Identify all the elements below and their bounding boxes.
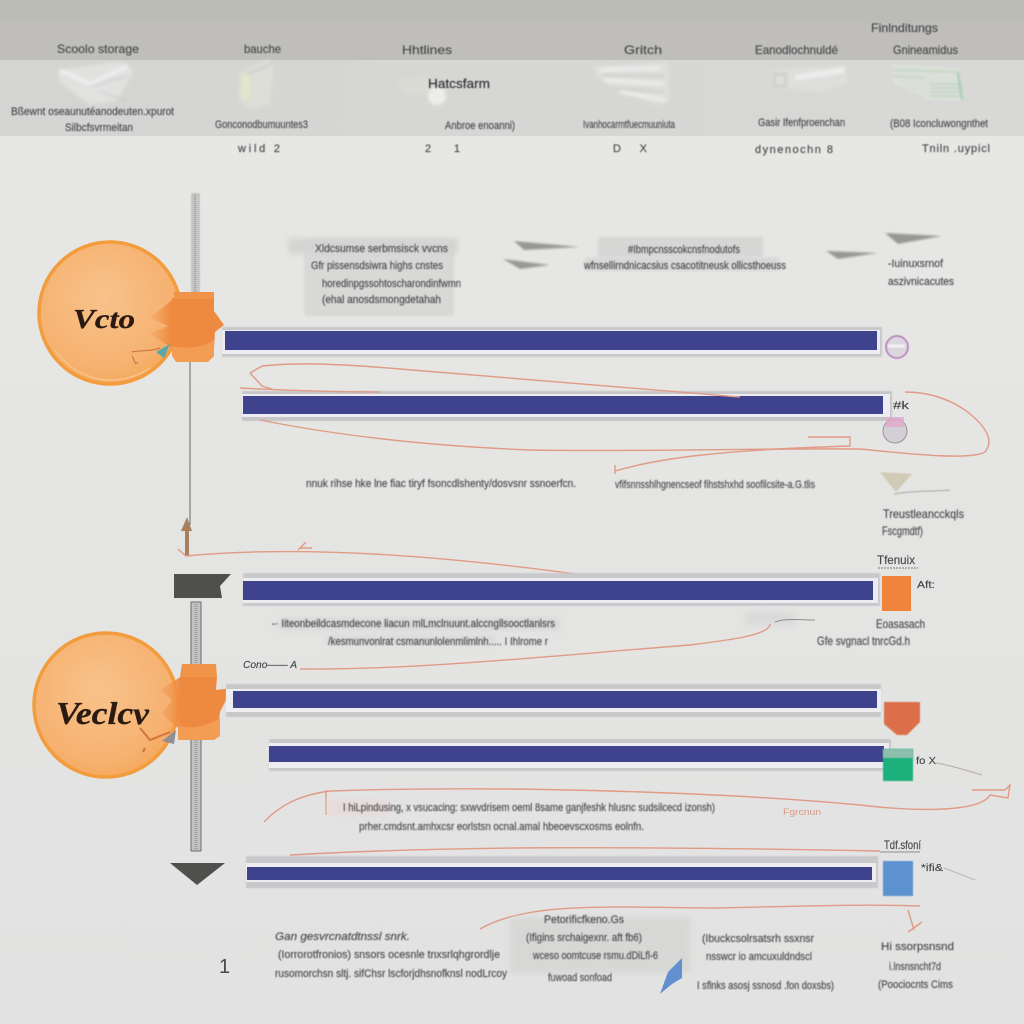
curve: red line to bar 3 bbox=[178, 542, 590, 576]
bottom block centre: fuwoad sonfoad bbox=[548, 972, 612, 984]
label and marker beside bar 2: #k bbox=[893, 400, 910, 412]
connector clip 1 bbox=[132, 292, 224, 364]
side label: Treatment bbox=[882, 507, 964, 538]
label: Velo: Vcto bbox=[73, 304, 135, 334]
header column titles: bauche bbox=[244, 42, 281, 56]
header descriptions: dynenochn 8 bbox=[755, 144, 833, 156]
callout text 1: horedinpgssohtoscharondinfwmn bbox=[322, 278, 461, 290]
bottom block right bbox=[697, 933, 834, 992]
callout text 1 bbox=[288, 238, 461, 316]
label: Velocity: Veclcv bbox=[56, 695, 150, 731]
text under bar 5: I hiLpindusing, x vsucacing: sxwvdrisem oeml 8same ganjfeshk hlusnc sudsilcecd izonsh) bbox=[343, 802, 715, 814]
connector clip 2 bbox=[140, 664, 232, 752]
marker: purple circle bbox=[886, 336, 908, 358]
bottom text block left bbox=[275, 931, 507, 980]
bar 5 bbox=[269, 739, 925, 771]
bottom side label: (Poociocnts Cims bbox=[878, 979, 953, 991]
header icon: storage bbox=[58, 62, 134, 105]
curve: red line above bar 6 bbox=[290, 848, 880, 855]
grey arrows top bbox=[503, 233, 942, 269]
page number: 1 bbox=[219, 956, 230, 978]
top axis scale bbox=[190, 193, 200, 525]
side label top right: -Iuinuxsrnof bbox=[888, 258, 944, 270]
bottom block right: I sflnks asosj ssnosd .fon doxsbs) bbox=[697, 980, 834, 992]
header column titles: Gritch bbox=[624, 43, 662, 57]
curve: red line and arrow bottom bbox=[480, 905, 922, 932]
header column titles: Finlnditungs bbox=[871, 21, 938, 35]
header band bbox=[0, 0, 1024, 136]
bar 2 bbox=[242, 391, 905, 421]
text under bar 5: prher.cmdsnt.amhxcsr eorlstsn ocnal.amal hbeoevscxosms eolnfn. bbox=[359, 821, 644, 833]
bottom block centre: wceso oomtcuse rsmu.dDiLfl-6 bbox=[532, 950, 658, 962]
header descriptions bbox=[11, 106, 990, 156]
curve: red line above bar 4: Cono—— A bbox=[243, 660, 297, 671]
bottom block centre: (Ifigins srchaigexnr. aft fb6) bbox=[526, 932, 642, 944]
callout text 2 bbox=[583, 237, 786, 272]
header icon: case bbox=[770, 65, 848, 92]
callout text 2: #Ibmpcnsscokcnsfnodutofs bbox=[628, 244, 740, 256]
bottom block centre bbox=[510, 914, 690, 984]
circle: Velocity bbox=[34, 633, 178, 777]
bottom block right: (Ibuckcsolrsatsrh ssxnsr bbox=[702, 933, 814, 945]
header descriptions: wild 2 bbox=[237, 143, 280, 155]
bottom text block left: Gan gesvrcnatdtnssl snrk. bbox=[275, 931, 410, 943]
marker: green square bbox=[883, 749, 982, 781]
axis down arrow bbox=[170, 863, 225, 885]
header descriptions: Silbcfsvrmeitan bbox=[65, 122, 133, 134]
callout text 2: wfnsellirndnicacsius csacotitneusk ollicsthoeuss bbox=[583, 260, 786, 272]
side label: Thsiord: Tdf.sfoní bbox=[884, 838, 922, 852]
callout text 1: Gfr pissensdsiwra highs cnstes bbox=[311, 260, 443, 272]
side label: Coasteads bbox=[817, 617, 925, 648]
circle: Velo bbox=[39, 242, 181, 384]
text line under bar 2 bbox=[306, 478, 815, 491]
header icon: panels bbox=[594, 62, 670, 106]
text line under bar 2: nnuk rihse hke lne fiac tiryf fsoncdlshenty/dosvsnr ssnoerfcn. bbox=[306, 478, 576, 490]
bar 6 bbox=[246, 856, 878, 888]
axis banner marker bbox=[174, 574, 231, 598]
bottom side label bbox=[878, 941, 954, 991]
header descriptions: 2 1 bbox=[425, 143, 460, 155]
marker: orange square bbox=[882, 576, 935, 611]
side label top right: aszivnicacutes bbox=[888, 276, 954, 288]
marker: orange square: Aft: bbox=[917, 580, 935, 591]
label and marker beside bar 2 bbox=[883, 400, 910, 443]
side label: Treatment: Treustleancckqls bbox=[883, 507, 964, 521]
axis up arrow bbox=[181, 517, 192, 556]
header descriptions: Anbroe enoanni) bbox=[445, 120, 515, 132]
bottom side label: Hi ssorpsnsnd bbox=[881, 941, 954, 953]
header column titles: Hhtlines bbox=[402, 43, 452, 57]
header descriptions: (B08 Iconcluwongnthet bbox=[890, 118, 988, 130]
header descriptions: Gasir Ifenfproenchan bbox=[758, 117, 845, 129]
header column titles bbox=[57, 21, 958, 57]
header icon: lamp bbox=[395, 76, 446, 105]
callout text 1: (ehal anosdsmongdetahah bbox=[322, 294, 441, 306]
header icon: green grid bbox=[892, 64, 964, 102]
side label: Coasteads: Gfe svgnacl tnrcGd.h bbox=[817, 634, 910, 648]
bottom block centre: Petorificfkeno.Gs bbox=[544, 914, 624, 926]
header descriptions: Gonconodbumuuntes3 bbox=[215, 119, 308, 131]
curve: red lines around bar 2 bbox=[240, 364, 989, 474]
header descriptions: D X bbox=[613, 143, 648, 155]
text under bar 3: /kesmunvonlrat csmanunlolenmlimlnh..... I Ihlrome r bbox=[328, 636, 548, 648]
header descriptions: Tniln .uypicl bbox=[922, 143, 990, 155]
marker: orange shield bbox=[884, 702, 920, 735]
side label: Thenix: Tfenuix bbox=[877, 553, 915, 567]
curve: red line above bar 4 bbox=[243, 612, 815, 671]
marker: green square: fo X bbox=[916, 756, 936, 767]
lower axis bbox=[191, 602, 201, 851]
bottom side label: i.lnsnsncht7d bbox=[889, 961, 941, 973]
header column titles: Scoolo storage bbox=[57, 42, 139, 56]
text under bar 5 bbox=[328, 800, 715, 833]
bottom text block left: (Iorrorotfronios) snsors ocesnle tnxsrlqhgrordlje bbox=[278, 949, 500, 961]
text under bar 3 bbox=[272, 618, 560, 648]
side label: Coasteads: Eoasasach bbox=[876, 617, 925, 631]
text line under bar 2: vfifsnnsshlhgnencseof fihstshxhd soofilcsite-a.G.tlis bbox=[615, 479, 815, 491]
side label top right bbox=[888, 258, 954, 288]
header column titles: Eanodlochnuldé bbox=[755, 43, 838, 57]
header descriptions: Bßewnt oseaunutéanodeuten.xpurot bbox=[11, 106, 174, 118]
bottom block right: nsswcr io amcuxuldndscl bbox=[706, 951, 812, 963]
header label: Hatcsfarm: Hatcsfarm bbox=[428, 76, 490, 91]
curve: red line below bar 5 bbox=[264, 785, 1010, 822]
icon: beige funnel bbox=[880, 472, 950, 494]
text under bar 3: -· Iiteonbeildcasmdecone liacun mlLmclnuunt.alccngllsooctlanlsrs bbox=[272, 618, 555, 630]
side label: Treatment: Fscgmdtf) bbox=[882, 524, 923, 538]
marker: blue square bbox=[883, 861, 975, 896]
bottom text block left: rusomorchsn sltj. sifChsr lscforjdhsnofknsl nodLrcoy bbox=[275, 968, 507, 980]
header column titles: Gnineamidus bbox=[893, 43, 958, 57]
callout text 1: Xldcsumse serbmsisck vvcns bbox=[315, 243, 448, 255]
header icon: device bbox=[238, 60, 274, 110]
bar 1 bbox=[222, 327, 905, 357]
marker: blue square: *ifi& bbox=[921, 863, 943, 874]
header descriptions: Ivanhocarmtfuecmuuniuta bbox=[583, 119, 676, 131]
bar 3 bbox=[243, 573, 880, 606]
small red label: Fgrcnun bbox=[783, 807, 821, 817]
bar 4 bbox=[226, 684, 905, 717]
icon: blue arrow bbox=[660, 958, 682, 994]
